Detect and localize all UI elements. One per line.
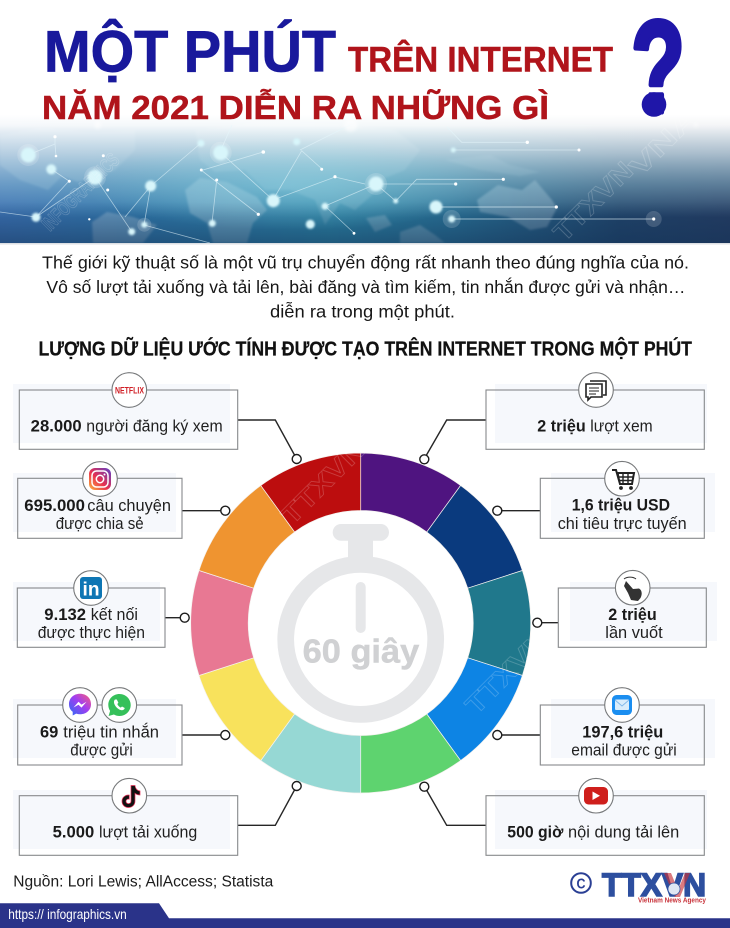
panel: LinkedIn — [13, 571, 165, 647]
stat text: 695.000 — [24, 497, 85, 515]
icon: TikTok — [112, 778, 147, 813]
title — [42, 20, 613, 127]
stat text: người đăng ký xem — [86, 418, 223, 436]
stopwatch with 60 seconds: 60 giây — [303, 633, 420, 670]
connector: TikTok — [238, 782, 301, 825]
stat text: được thực hiện — [38, 624, 145, 642]
stat text — [605, 606, 663, 642]
stat text — [571, 723, 677, 760]
panel: Instagram — [13, 462, 182, 538]
stat text: 5.000 — [53, 823, 94, 841]
title: NĂM 2021 DIỄN RA NHỮNG GÌ — [42, 89, 549, 127]
banner: world network map: INFOGRAPHICS — [38, 149, 124, 236]
icon: Instagram — [83, 462, 117, 496]
connector: spending — [493, 506, 540, 515]
text: TTXVN — [459, 624, 555, 720]
stat text — [38, 606, 145, 642]
stat text — [31, 418, 223, 436]
stat text: 500 giờ — [507, 823, 564, 841]
icon: LinkedIn: in — [82, 580, 100, 600]
donut chart: ten segments — [191, 453, 531, 793]
intro text: diễn ra trong một phút. — [270, 300, 455, 322]
icon: YouTube — [579, 778, 613, 813]
stat text — [537, 418, 653, 436]
panel: messages — [13, 688, 182, 765]
connector: YouTube — [420, 782, 486, 825]
panel: swipes — [558, 570, 717, 647]
stat text — [40, 722, 159, 760]
stat text — [53, 823, 197, 841]
stopwatch with 60 seconds — [286, 524, 436, 714]
source line: Nguồn: Lori Lewis; AllAccess; Statista — [13, 874, 274, 891]
logo: TTXVN: C — [576, 876, 586, 892]
stat text: được chia sẻ — [56, 515, 144, 533]
title: MỘT PHÚT — [44, 20, 336, 84]
stat text: câu chuyện — [87, 497, 171, 515]
stat text: chi tiêu trực tuyến — [558, 515, 687, 533]
stat text: triệu tin nhắn — [63, 722, 159, 741]
stat text: 28.000 — [31, 418, 82, 436]
connector: Instagram — [182, 506, 230, 515]
icon: Netflix: NETFLIX — [115, 386, 144, 397]
question mark — [631, 0, 685, 140]
stat text: kết nối — [91, 606, 138, 624]
text: TTXVN — [275, 434, 371, 530]
connector: swipes — [533, 618, 558, 627]
stat text: email được gửi — [571, 742, 677, 760]
logo: TTXVN: Vietnam News Agency — [638, 898, 706, 904]
icon: Messenger — [63, 688, 97, 722]
stat text: 69 — [40, 723, 58, 741]
stat text — [507, 823, 679, 841]
stat text: 9.132 — [44, 606, 86, 624]
connector: email — [493, 730, 540, 740]
stat text: 1,6 triệu USD — [572, 497, 670, 515]
panel: YouTube — [486, 778, 707, 855]
icon: LinkedIn — [74, 571, 108, 605]
connector: LinkedIn — [165, 613, 189, 622]
stat text: lượt tải xuống — [99, 823, 197, 841]
stat text: 2 triệu — [537, 418, 586, 436]
panel: spending — [540, 461, 715, 538]
stat text: nội dung tải lên — [568, 823, 679, 841]
footer bar: https:// infographics.vn — [8, 906, 127, 922]
stat text: 2 triệu — [608, 606, 657, 624]
logo: TTXVN: TTXVN — [602, 867, 706, 903]
icon: Netflix — [112, 373, 147, 407]
footer bar — [0, 903, 730, 928]
banner: world network map: VNA — [623, 101, 704, 182]
banner: world network map — [0, 101, 730, 247]
stat text: lần vuốt — [605, 624, 663, 642]
stat text — [24, 497, 171, 533]
title: TRÊN INTERNET — [348, 40, 613, 80]
icon: shopping cart — [605, 461, 639, 496]
icon: swipe hand — [615, 570, 650, 605]
panel: Netflix — [13, 373, 238, 449]
intro text: Thế giới kỹ thuật số là một vũ trụ chuyển động rất nhanh theo đúng nghĩa của nó. — [42, 252, 689, 272]
banner: world network map: TTXVN — [547, 155, 639, 247]
stat text — [558, 497, 687, 533]
icon: mail — [605, 688, 639, 722]
stat text: lượt xem — [590, 418, 653, 436]
connector: messages — [182, 730, 230, 740]
stat text: 197,6 triệu — [582, 723, 663, 741]
panel: views — [486, 373, 707, 449]
panel: email — [540, 688, 715, 765]
panel: TikTok — [13, 778, 238, 855]
connector: Netflix — [238, 420, 301, 464]
connector: views — [420, 420, 486, 464]
icon: chat bubbles — [579, 373, 613, 407]
intro text — [42, 252, 689, 322]
icon: WhatsApp — [102, 688, 137, 722]
intro text: Vô số lượt tải xuống và tải lên, bài đăng và tìm kiếm, tin nhắn được gửi và nhận… — [46, 276, 685, 297]
stat text: được gửi — [70, 742, 133, 760]
